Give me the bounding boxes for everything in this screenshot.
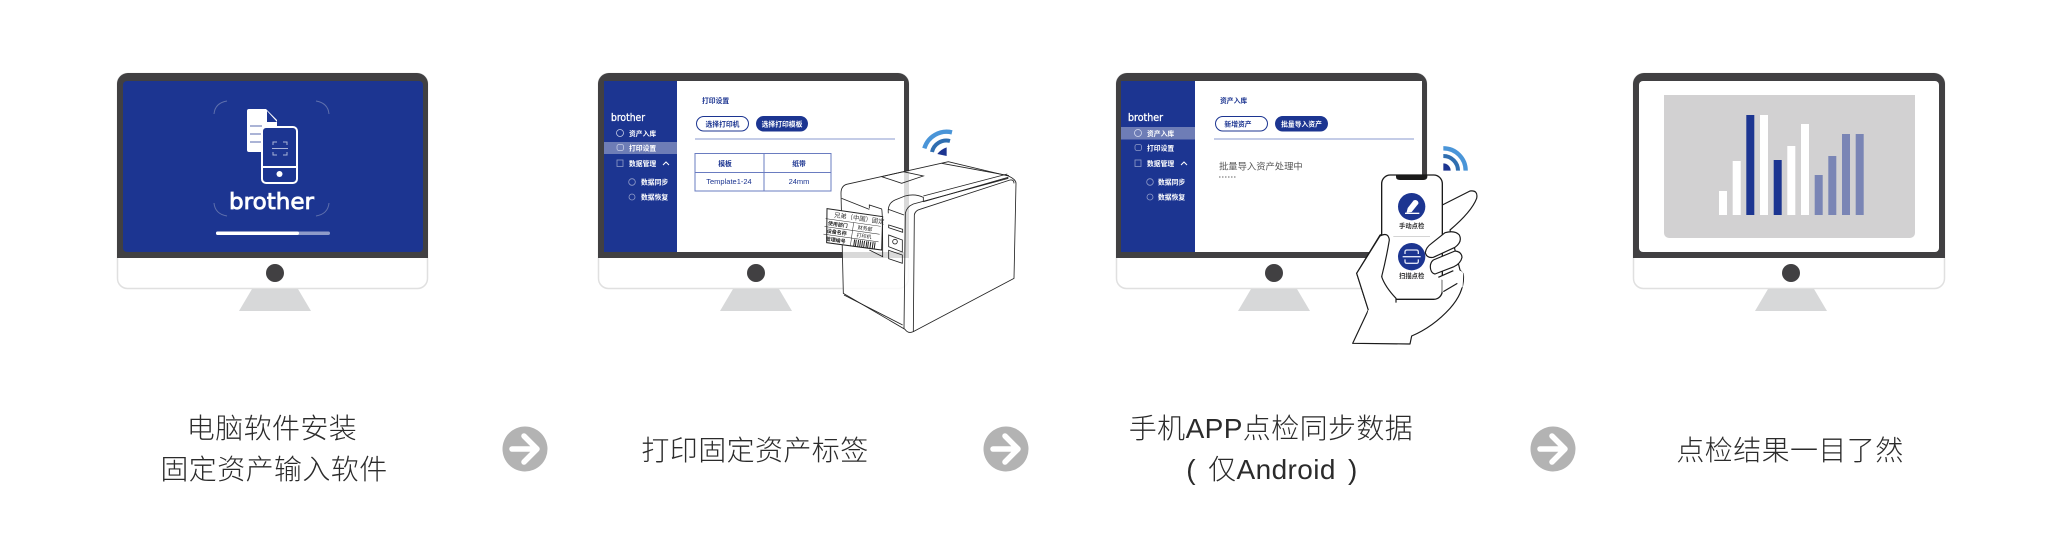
button: choose printer <box>696 116 748 131</box>
processing message: 批量导入资产处理中 <box>1219 160 1303 172</box>
bar chart <box>1719 115 1864 215</box>
phone <box>1382 175 1442 299</box>
arrow: step 3 to 4 <box>1530 426 1576 472</box>
monitor body <box>1116 73 1427 311</box>
sidebar: 资产入库 <box>629 129 656 138</box>
progress bar <box>216 232 330 235</box>
icon: wifi signal <box>1443 148 1466 171</box>
monitor body <box>598 73 909 311</box>
monitor body <box>117 73 428 311</box>
template table: 24mm <box>789 177 809 186</box>
icon: wifi signal <box>924 132 952 156</box>
printer body <box>841 162 1016 332</box>
sidebar <box>1121 81 1195 252</box>
icon: corner brackets <box>214 101 329 216</box>
sidebar: 数据管理 <box>1147 159 1174 168</box>
asset label: 兄弟（中国）固定 <box>834 210 886 226</box>
heading: 打印设置 <box>702 96 729 105</box>
asset label: 使用部门 <box>827 220 848 230</box>
hand thumb <box>1357 235 1396 317</box>
sidebar: brother <box>1128 112 1164 124</box>
heading: 资产入库 <box>1220 96 1247 105</box>
button: bulk import <box>1275 116 1328 132</box>
processing dots <box>1219 176 1237 178</box>
asset label: 财务部 <box>857 224 873 233</box>
brother logo: brother <box>229 189 315 215</box>
sidebar: brother <box>611 112 646 124</box>
divider line <box>1214 138 1414 140</box>
asset label <box>822 209 886 251</box>
button: add asset: 新增资产 <box>1224 120 1252 128</box>
divider line <box>695 138 895 140</box>
template table: 模板 <box>718 159 732 168</box>
printer details <box>842 163 1014 332</box>
caption: step 1: 电脑软件安装 <box>187 413 357 444</box>
blue splash screen <box>123 81 423 252</box>
button: bulk import: 批量导入资产 <box>1281 120 1322 128</box>
button: choose template <box>756 116 808 132</box>
sidebar: 数据管理 <box>629 159 656 168</box>
arrow: step 2 to 3 <box>984 426 1028 472</box>
arrow: step 1 to 2 <box>502 426 548 472</box>
sidebar: 数据同步 <box>641 178 668 186</box>
panel: step 3 asset intake monitor <box>1116 73 1427 311</box>
illustration: hand holding phone <box>1353 148 1477 344</box>
asset label: 打印机 <box>856 232 872 241</box>
icon: manual check <box>1398 193 1425 220</box>
template table <box>695 154 831 191</box>
button: add asset <box>1216 116 1268 131</box>
caption: step 2: 打印固定资产标签 <box>641 435 869 466</box>
panel: step 1 install screen monitor <box>117 73 428 311</box>
hand fingers <box>1425 232 1463 300</box>
caption: step 3: ( 仅Android ) <box>1186 454 1358 485</box>
label: scan check: 扫描点检 <box>1399 271 1425 280</box>
asset label: 管理编号 <box>825 235 846 245</box>
monitor body <box>1633 73 1945 311</box>
icon: document and phone <box>247 109 297 183</box>
sidebar: 数据同步 <box>1158 178 1185 186</box>
illustration: label printer <box>822 132 1016 332</box>
sidebar: 打印设置 <box>1147 144 1174 152</box>
button: choose template: 选择打印模板 <box>762 120 803 128</box>
chart background <box>1664 95 1915 238</box>
white screen <box>1639 81 1939 252</box>
asset label: 设备名称 <box>826 228 847 237</box>
sidebar: 打印设置 <box>629 144 656 152</box>
caption: step 4: 点检结果一目了然 <box>1676 435 1904 466</box>
white screen <box>604 81 904 252</box>
caption: step 1 <box>160 413 388 485</box>
template table: Template1-24 <box>706 177 752 186</box>
sidebar <box>604 81 677 252</box>
caption: step 3 <box>1129 413 1413 485</box>
panel: step 2 print settings monitor <box>598 73 909 311</box>
button: choose printer: 选择打印机 <box>706 120 740 128</box>
template table: 纸带 <box>792 159 806 168</box>
icon: scan check <box>1398 243 1425 270</box>
caption: step 1: 固定资产输入软件 <box>160 454 388 485</box>
sidebar: 数据恢复 <box>641 192 668 202</box>
panel: step 4 results monitor <box>1633 73 1945 311</box>
caption: step 3: 手机APP点检同步数据 <box>1129 413 1413 444</box>
sidebar: 数据恢复 <box>1158 192 1185 202</box>
hand palm and index finger <box>1353 191 1477 344</box>
white screen <box>1121 81 1422 252</box>
label: manual check: 手动点检 <box>1399 221 1425 230</box>
sidebar: 资产入库 <box>1147 129 1174 138</box>
